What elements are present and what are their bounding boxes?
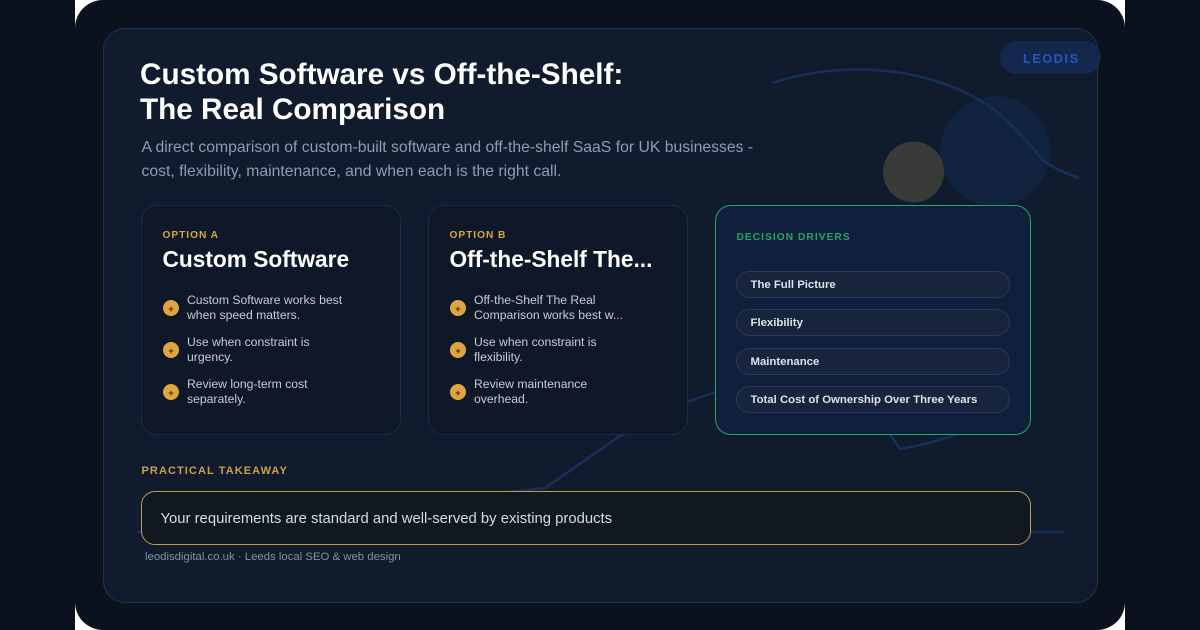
option A point 3 xyxy=(163,377,308,406)
driver: flexibility xyxy=(736,309,1010,336)
option A point 1 xyxy=(163,293,342,322)
option A point 3: + xyxy=(168,388,174,398)
takeaway heading: PRACTICAL TAKEAWAY xyxy=(142,465,288,477)
title: Custom Software vs Off-the-Shelf: xyxy=(140,58,623,91)
driver: flexibility: Flexibility xyxy=(750,317,803,329)
option A point 2: Use when constraint is xyxy=(187,335,310,349)
option A point 2 xyxy=(163,335,310,364)
title: The Real Comparison xyxy=(140,93,445,126)
option A point 3: separately. xyxy=(187,392,246,406)
driver: maintenance: Maintenance xyxy=(750,356,819,368)
option B label: OPTION B xyxy=(450,230,506,241)
logo badge xyxy=(1000,41,1101,74)
takeaway callout: Your requirements are standard and well-served by existing products xyxy=(160,511,612,527)
takeaway callout xyxy=(141,491,1031,545)
option B title: Off-the-Shelf The... xyxy=(450,246,652,272)
option A label: OPTION A xyxy=(162,230,219,241)
decision drivers label: DECISION DRIVERS xyxy=(736,232,851,242)
option B point 3: overhead. xyxy=(474,392,528,406)
option B point 1 xyxy=(450,293,623,322)
option B point 2: + xyxy=(455,346,461,356)
option A point 3: Review long-term cost xyxy=(187,377,308,391)
footer text: leodisdigital.co.uk · Leeds local SEO & web design xyxy=(145,551,401,563)
option B point 3 xyxy=(450,377,587,406)
option A point 1: Custom Software works best xyxy=(187,293,342,307)
option A point 2: + xyxy=(168,346,174,356)
panel: option B xyxy=(428,205,688,435)
driver: maintenance xyxy=(736,348,1010,374)
panel: option A xyxy=(141,205,401,435)
option B point 1: Comparison works best w... xyxy=(474,308,623,322)
driver: the full picture xyxy=(736,270,1010,298)
title xyxy=(140,58,623,126)
option B point 2: flexibility. xyxy=(474,350,523,364)
option B point 1: + xyxy=(455,304,461,314)
option A point 1: when speed matters. xyxy=(187,308,300,322)
subtitle xyxy=(142,138,753,180)
driver: total cost xyxy=(736,386,1010,413)
subtitle: cost, flexibility, maintenance, and when each is the right call. xyxy=(142,162,561,180)
main panel xyxy=(103,28,1098,602)
panel: decision drivers xyxy=(715,205,1031,435)
driver: the full picture: The Full Picture xyxy=(750,278,836,290)
option A title: Custom Software xyxy=(162,246,349,272)
option B point 2 xyxy=(450,335,597,364)
option A point 1: + xyxy=(168,304,174,314)
logo badge: LEODIS xyxy=(1023,52,1080,66)
option A point 2: urgency. xyxy=(187,350,233,364)
driver: total cost: Total Cost of Ownership Over Three Years xyxy=(750,394,977,406)
option B point 1: Off-the-Shelf The Real xyxy=(474,293,596,307)
subtitle: A direct comparison of custom-built software and off-the-shelf SaaS for UK businesses - xyxy=(142,138,753,156)
option B point 3: + xyxy=(455,388,461,398)
option B point 3: Review maintenance xyxy=(474,377,587,391)
option B point 2: Use when constraint is xyxy=(474,335,597,349)
